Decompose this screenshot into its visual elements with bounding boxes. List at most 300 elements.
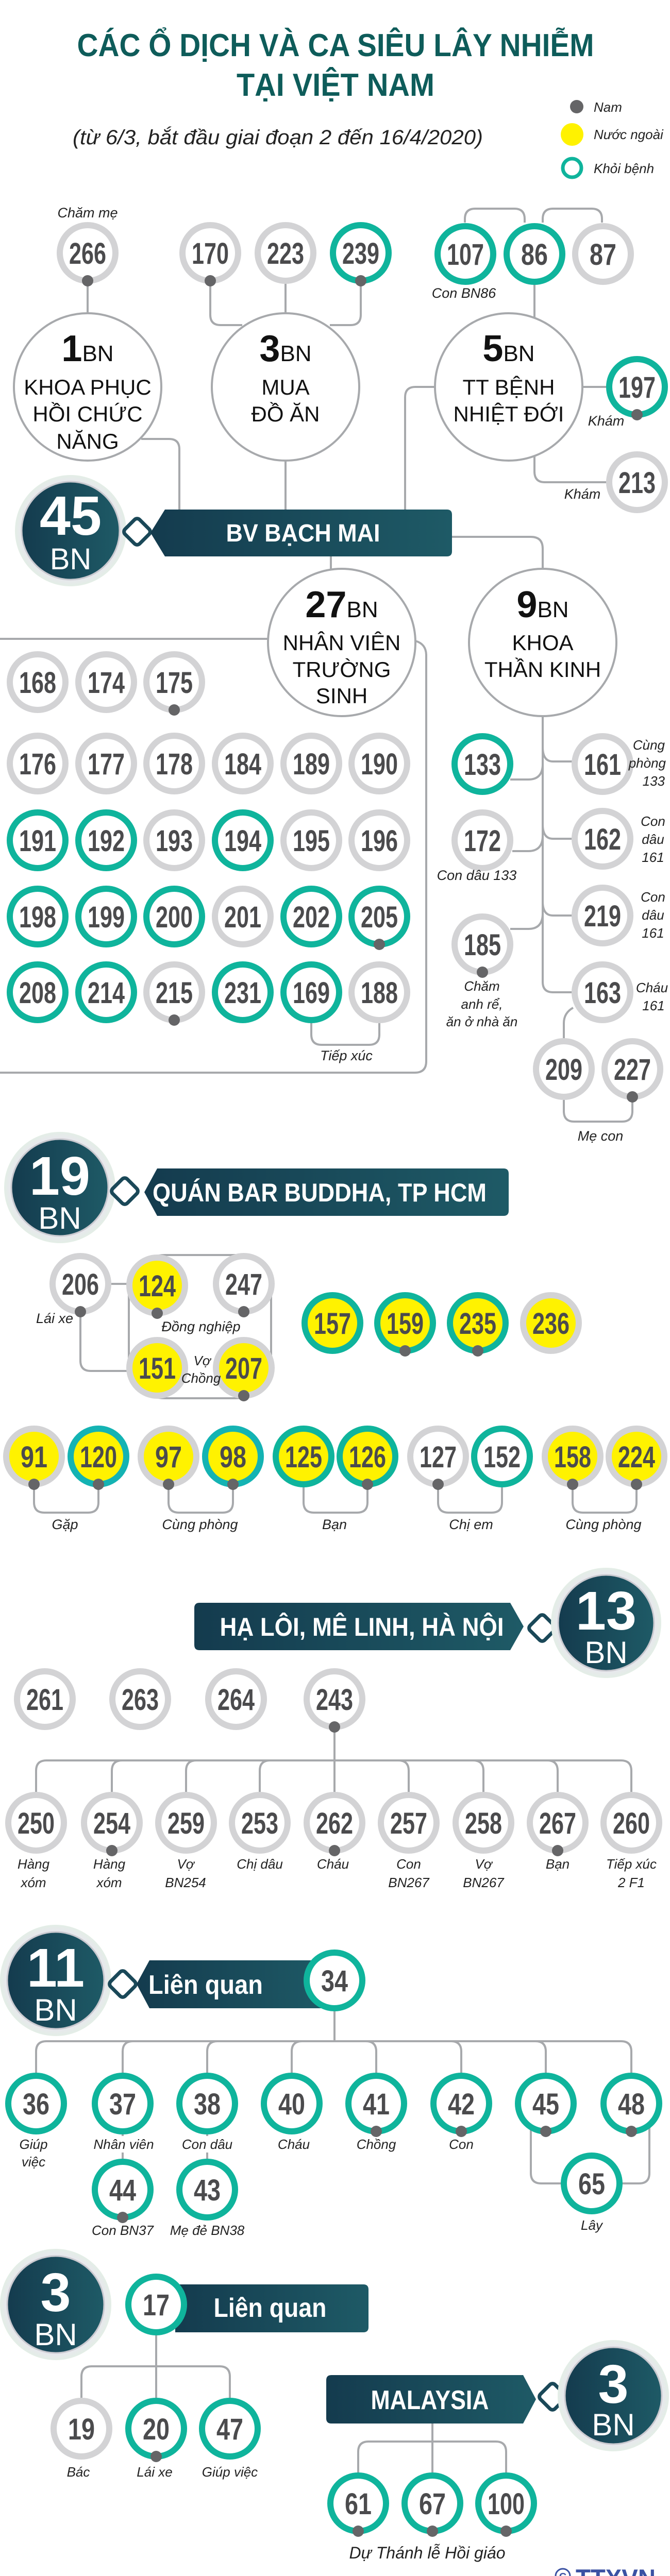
banner: BV Bach Mai — [150, 510, 452, 556]
node 239 — [333, 225, 389, 286]
node 235 — [450, 1295, 506, 1357]
labels Ha Loi relations: BN254 — [165, 1875, 206, 1890]
node 208 — [10, 964, 65, 1020]
node 125 — [276, 1429, 331, 1484]
cluster circle: 9BN khoa than kinh: KHOA — [512, 631, 574, 655]
label: Vo Chong: Vợ — [193, 1353, 212, 1368]
node 261 — [17, 1671, 73, 1727]
badge: 3 BN left: 3 — [41, 2262, 71, 2323]
cluster circle: 1BN khoa phuc hoi chuc nang: NĂNG — [56, 429, 119, 453]
node 87 — [575, 226, 631, 282]
node 169 — [283, 964, 339, 1020]
node 191 — [10, 812, 65, 868]
node 189: 189 — [293, 748, 330, 781]
node 61 — [330, 2476, 386, 2537]
node 209 — [536, 1041, 592, 1097]
node 219: 219 — [584, 900, 621, 933]
badge: 45 BN — [15, 475, 126, 586]
node 176: 176 — [19, 748, 56, 781]
badge: 11 BN: 11 — [27, 1938, 85, 1998]
node 258: 258 — [465, 1807, 502, 1840]
node 247 — [216, 1256, 272, 1317]
node 100 — [478, 2476, 534, 2537]
node 264 — [208, 1671, 264, 1727]
node 48 — [604, 2076, 659, 2137]
node 257 — [381, 1795, 437, 1851]
cluster circle: 1BN khoa phuc hoi chuc nang: 1BN — [61, 328, 114, 369]
node 45 — [518, 2076, 574, 2137]
node 247: 247 — [225, 1268, 262, 1301]
node 192: 192 — [88, 824, 125, 858]
cluster circle: 1BN khoa phuc hoi chuc nang — [14, 313, 161, 461]
node 175 — [146, 654, 202, 716]
node 199 — [78, 889, 134, 944]
node 224: 224 — [618, 1440, 655, 1474]
connector diamond — [110, 1177, 139, 1206]
connectors Ha Loi — [36, 1730, 631, 1792]
node 20 — [128, 2401, 184, 2462]
node 206: 206 — [62, 1268, 99, 1301]
badge: 19 BN: 19 — [29, 1146, 90, 1207]
node 91: 91 — [21, 1440, 47, 1474]
label: Con dau 161 (2): 161 — [642, 925, 664, 941]
label: Vo Chong — [181, 1353, 221, 1386]
node 168 — [10, 654, 65, 710]
cluster circle: 27BN nhan vien truong sinh — [268, 569, 415, 716]
node 185: 185 — [464, 928, 501, 962]
node 263 — [112, 1671, 168, 1727]
node 42 — [433, 2076, 489, 2137]
labels Ha Loi relations: Con — [396, 1856, 421, 1872]
node 174 — [78, 654, 134, 710]
node 257: 257 — [390, 1807, 427, 1840]
node 34: 34 — [321, 1964, 348, 1998]
banner: Ha Loi Me Linh: HẠ LÔI, MÊ LINH, HÀ NỘI — [220, 1612, 504, 1641]
node 97: 97 — [155, 1440, 182, 1474]
node 231 — [215, 964, 271, 1020]
node 126 — [340, 1429, 395, 1490]
label: Chi em: Chị em — [449, 1517, 493, 1532]
labels 34 relations — [20, 2136, 474, 2170]
node 194: 194 — [224, 824, 261, 858]
node 36: 36 — [23, 2088, 49, 2121]
label: Cung phong 133: Cùng — [633, 737, 665, 753]
labels Ha Loi relations: 2 F1 — [617, 1875, 645, 1890]
label: Cung phong 133: phòng — [628, 755, 666, 771]
labels second row — [92, 2217, 604, 2238]
banner: Lien quan 17: Liên quan — [213, 2293, 327, 2323]
node 184 — [215, 736, 271, 791]
label: Lai xe: Lái xe — [36, 1311, 73, 1326]
node 213: 213 — [618, 466, 656, 500]
labels Ha Loi relations: BN267 — [463, 1875, 505, 1890]
node 172 — [455, 812, 510, 868]
node 162 — [575, 811, 630, 867]
node 65 — [564, 2156, 619, 2211]
connectors Malaysia — [358, 2424, 506, 2472]
banner: Lien quan 34: Liên quan — [148, 1970, 263, 2000]
node 37 — [95, 2076, 150, 2131]
label: Chau 161 — [636, 980, 668, 1013]
cluster circle: 27BN nhan vien truong sinh: SINH — [316, 684, 367, 708]
node 158: 158 — [554, 1440, 591, 1474]
node 161: 161 — [584, 748, 621, 782]
node 157: 157 — [314, 1307, 351, 1341]
connectors 17 — [81, 2335, 230, 2398]
node 125: 125 — [285, 1440, 322, 1474]
node 162: 162 — [584, 823, 621, 856]
banner: Malaysia: MALAYSIA — [371, 2385, 489, 2415]
badge: 19 BN: BN — [38, 1201, 81, 1235]
node 239: 239 — [342, 237, 379, 270]
node 243 — [307, 1671, 362, 1733]
node 67: 67 — [419, 2487, 446, 2521]
node 98 — [205, 1429, 261, 1490]
node 258 — [456, 1795, 511, 1851]
badge: 11 BN: BN — [34, 1993, 77, 2027]
cluster circle: 5BN TT benh nhiet doi: TT BỆNH — [463, 375, 555, 399]
badge: 13 BN — [551, 1568, 661, 1678]
node 178 — [146, 736, 202, 791]
node 40 — [264, 2076, 320, 2131]
node 38: 38 — [194, 2088, 221, 2121]
node 124 — [129, 1258, 185, 1319]
badge: 13 BN: 13 — [576, 1581, 636, 1641]
node 215: 215 — [156, 976, 193, 1010]
cluster circle: 1BN khoa phuc hoi chuc nang: KHOA PHỤC — [24, 375, 152, 399]
node 161 — [575, 736, 630, 792]
labels Ha Loi relations: Cháu — [317, 1856, 349, 1872]
labels 34 relations: Nhân viên — [93, 2137, 154, 2152]
node 213 — [609, 454, 665, 510]
node 205: 205 — [361, 901, 398, 934]
labels 17 relations: Lái xe — [137, 2464, 173, 2480]
connectors section 1 — [88, 209, 606, 570]
label: Cung phong 2: Cùng phòng — [565, 1517, 642, 1532]
label: Cham anh re: ăn ở nhà ăn — [446, 1014, 517, 1029]
badge: 3 BN right — [558, 2340, 669, 2451]
label: Chăm mẹ: Chăm mẹ — [57, 205, 118, 221]
labels 34 relations: Con — [449, 2137, 474, 2152]
node 267 — [530, 1795, 585, 1856]
node 127 — [410, 1429, 466, 1490]
label: Con dau 161 — [641, 814, 665, 865]
node 197: 197 — [618, 371, 656, 404]
banner: Malaysia — [326, 2375, 536, 2424]
node 215 — [146, 964, 202, 1026]
node 199: 199 — [88, 901, 125, 934]
banner: Lien quan 17 — [175, 2284, 368, 2332]
node 236: 236 — [532, 1307, 569, 1341]
node 127: 127 — [420, 1440, 457, 1474]
legend: Nam — [594, 99, 622, 115]
node 159: 159 — [387, 1307, 424, 1341]
node 163 — [575, 964, 630, 1020]
node 97 — [141, 1429, 196, 1490]
node 243: 243 — [316, 1683, 353, 1717]
node 86 — [507, 226, 562, 282]
node 45: 45 — [532, 2088, 559, 2121]
labels second row: Con BN37 — [92, 2223, 155, 2238]
node 124: 124 — [139, 1269, 176, 1303]
node 91 — [6, 1429, 62, 1490]
title: TẠI VIỆT NAM — [237, 67, 434, 103]
node 177 — [78, 736, 134, 791]
labels 17 relations: Bác — [67, 2464, 90, 2480]
node 192 — [78, 812, 134, 868]
badge: 3 BN right: 3 — [598, 2354, 628, 2415]
node 254: 254 — [93, 1807, 130, 1840]
label: Con BN86: Con BN86 — [432, 285, 496, 301]
connector diamond — [528, 1614, 557, 1642]
node 87: 87 — [590, 238, 616, 272]
node 20: 20 — [143, 2413, 170, 2446]
node 86: 86 — [521, 238, 548, 272]
node 196 — [351, 812, 407, 868]
node 170 — [182, 225, 238, 286]
node 43 — [179, 2162, 235, 2217]
node 223: 223 — [267, 237, 304, 270]
cluster circle: 27BN nhan vien truong sinh: NHÂN VIÊN — [283, 631, 400, 655]
label: Cung phong 133: 133 — [643, 773, 665, 789]
node 250 — [8, 1795, 64, 1851]
node 227: 227 — [614, 1053, 651, 1087]
badge: 45 BN: BN — [50, 543, 91, 576]
node 17: 17 — [143, 2289, 170, 2322]
node 260: 260 — [613, 1807, 650, 1840]
badge: 3 BN right: BN — [592, 2408, 635, 2442]
node 254 — [84, 1795, 140, 1856]
labels 34 relations: việc — [22, 2154, 45, 2170]
node 170: 170 — [192, 237, 229, 270]
node 200: 200 — [156, 901, 193, 934]
connectors 34 — [36, 2011, 649, 2183]
node 152 — [474, 1429, 530, 1484]
label: Du Thanh le Hoi giao: Dự Thánh lễ Hồi giáo — [349, 2544, 506, 2562]
labels 34 relations: Giúp — [20, 2137, 47, 2152]
node 236 — [523, 1295, 579, 1351]
node 120 — [71, 1429, 126, 1490]
badge: 3 BN left — [0, 2249, 111, 2360]
node 262: 262 — [316, 1807, 353, 1840]
connectors section 2 — [0, 639, 632, 1122]
node 193: 193 — [156, 824, 193, 858]
label: Chau 161: 161 — [642, 998, 665, 1013]
node 195 — [283, 812, 339, 868]
node 214 — [78, 964, 134, 1020]
connectors HCM — [34, 1255, 636, 1513]
node 152: 152 — [483, 1440, 521, 1474]
title — [77, 27, 594, 103]
cluster circle: 9BN khoa than kinh — [469, 569, 616, 716]
node 261: 261 — [26, 1683, 63, 1717]
node 65: 65 — [578, 2167, 605, 2201]
node 36 — [8, 2076, 64, 2131]
labels second row: Mẹ đẻ BN38 — [170, 2223, 245, 2238]
node 253 — [232, 1795, 288, 1851]
label: Con dau 161: dâu — [642, 832, 664, 847]
banner: BV Bach Mai: BV BẠCH MAI — [226, 520, 380, 547]
node 201: 201 — [224, 901, 261, 934]
labels Ha Loi relations: BN267 — [388, 1875, 430, 1890]
labels Ha Loi relations: Vợ — [177, 1856, 195, 1872]
banner: Quan bar Buddha — [144, 1168, 509, 1216]
label: Con dau 161: Con — [641, 814, 665, 829]
label: Me con: Mẹ con — [578, 1128, 623, 1144]
labels 34 relations: Chồng — [357, 2137, 396, 2152]
node 206 — [53, 1256, 108, 1317]
node 188 — [351, 964, 407, 1020]
node 133 — [455, 736, 510, 792]
node 262 — [307, 1795, 362, 1856]
node 151 — [129, 1340, 185, 1396]
node 168: 168 — [19, 666, 56, 700]
label: Con dau 161 (2): Con — [641, 889, 665, 905]
node 259: 259 — [167, 1807, 205, 1840]
node 41: 41 — [363, 2088, 390, 2121]
node 196: 196 — [361, 824, 398, 858]
node 163: 163 — [584, 976, 621, 1010]
node 47: 47 — [216, 2413, 243, 2446]
node 227 — [605, 1041, 660, 1103]
node 17 — [128, 2277, 184, 2332]
node 202 — [283, 889, 339, 944]
node 208: 208 — [19, 976, 56, 1010]
node 48: 48 — [618, 2088, 645, 2121]
node 260 — [604, 1795, 659, 1851]
title: CÁC Ổ DỊCH VÀ CA SIÊU LÂY NHIỄM — [77, 27, 594, 63]
label: Con dau 161 (2): dâu — [642, 907, 664, 923]
label: Gap: Gặp — [52, 1517, 78, 1532]
node 259 — [158, 1795, 214, 1851]
node 200 — [146, 889, 202, 944]
node 198 — [10, 889, 65, 944]
badge: 11 BN — [0, 1925, 111, 2036]
cluster circle: 9BN khoa than kinh: 9BN — [516, 584, 569, 625]
node 224 — [609, 1429, 664, 1490]
labels Ha Loi relations: Chị dâu — [237, 1856, 283, 1872]
label: Vo Chong: Chồng — [181, 1370, 221, 1386]
badge: 13 BN: BN — [584, 1635, 628, 1670]
node 43: 43 — [194, 2174, 221, 2207]
cluster circle: 5BN TT benh nhiet doi: NHIỆT ĐỚI — [454, 402, 564, 426]
labels Ha Loi relations: Tiếp xúc — [606, 1856, 657, 1872]
node 250: 250 — [18, 1807, 55, 1840]
cluster circle: 3BN mua do an: 3BN — [259, 328, 312, 369]
labels Ha Loi relations — [18, 1856, 657, 1890]
cluster circle: 27BN nhan vien truong sinh: 27BN — [305, 584, 378, 625]
node 267: 267 — [539, 1807, 576, 1840]
grid: truong sinh patients — [10, 654, 407, 1026]
node 41 — [348, 2076, 404, 2137]
label: Dong nghiep: Đồng nghiệp — [161, 1319, 241, 1334]
node 191: 191 — [19, 824, 56, 858]
label: Tiep xuc: Tiếp xúc — [320, 1048, 373, 1063]
banner: Lien quan 34 — [137, 1960, 332, 2008]
banner: Quan bar Buddha: QUÁN BAR BUDDHA, TP HCM — [153, 1178, 487, 1207]
node 172: 172 — [464, 824, 501, 858]
node 253: 253 — [241, 1807, 278, 1840]
label: Con dau 161 (2) — [641, 889, 665, 941]
cluster circle: 5BN TT benh nhiet doi — [435, 313, 582, 461]
cluster circle: 3BN mua do an: ĐỒ ĂN — [251, 401, 320, 426]
cluster circle: 3BN mua do an: MUA — [261, 375, 310, 399]
labels second row: Lây — [581, 2217, 604, 2233]
node 177: 177 — [88, 748, 125, 781]
node 37: 37 — [109, 2088, 136, 2121]
node 107: 107 — [447, 238, 484, 272]
node 107 — [438, 226, 493, 282]
node 207: 207 — [225, 1352, 262, 1385]
labels Ha Loi relations: Vợ — [475, 1856, 493, 1872]
node 38 — [179, 2076, 235, 2131]
node 190 — [351, 736, 407, 791]
node 44 — [95, 2162, 150, 2223]
node 202: 202 — [293, 901, 330, 934]
node 98: 98 — [220, 1440, 246, 1474]
labels Ha Loi relations: Bạn — [546, 1856, 569, 1872]
label: Con dau 133: Con dâu 133 — [437, 868, 516, 883]
node 197 — [609, 359, 665, 420]
node 223 — [258, 225, 313, 281]
cluster circle: 5BN TT benh nhiet doi: 5BN — [482, 328, 535, 369]
labels 34 relations: Con dâu — [182, 2137, 232, 2152]
node 157 — [305, 1295, 360, 1351]
node 34 — [307, 1953, 362, 2008]
badge: 19 BN — [4, 1132, 115, 1243]
node 133: 133 — [464, 748, 501, 782]
legend — [561, 99, 664, 177]
label: Con dau 161: 161 — [642, 850, 664, 865]
connector diamond — [538, 2382, 567, 2411]
node 231: 231 — [224, 976, 261, 1010]
labels Ha Loi relations: Hàng — [93, 1856, 126, 1872]
node 178: 178 — [156, 748, 193, 781]
node 201 — [215, 889, 271, 944]
node 266 — [60, 225, 115, 286]
node 126: 126 — [349, 1440, 386, 1474]
node 205 — [351, 889, 407, 950]
node 100: 100 — [488, 2487, 525, 2521]
connector diamond — [108, 1970, 137, 1998]
node 207 — [216, 1340, 272, 1401]
node 189 — [283, 736, 339, 791]
node 120: 120 — [80, 1440, 117, 1474]
legend: Khỏi bệnh — [594, 161, 654, 176]
labels Ha Loi relations: xóm — [95, 1875, 122, 1890]
node 159 — [377, 1295, 433, 1357]
label: Cung phong: Cùng phòng — [162, 1517, 238, 1532]
node 195: 195 — [293, 824, 330, 858]
badge: 45 BN: 45 — [40, 484, 102, 547]
cluster circle: 3BN mua do an — [212, 313, 359, 461]
subtitle: (từ 6/3, bắt đầu giai đoạn 2 đến 16/4/2020) — [73, 126, 483, 149]
node 209: 209 — [545, 1053, 582, 1087]
labels 17 relations: Giúp việc — [202, 2464, 258, 2480]
banner: Ha Loi Me Linh — [194, 1603, 524, 1650]
node 61: 61 — [345, 2487, 372, 2521]
cluster circle: 9BN khoa than kinh: THẦN KINH — [484, 657, 601, 682]
node 235: 235 — [459, 1307, 496, 1341]
node 194 — [215, 812, 271, 868]
node 190: 190 — [361, 748, 398, 781]
node 264: 264 — [217, 1683, 255, 1717]
label: Cung phong 133 — [628, 737, 666, 789]
node 151: 151 — [139, 1352, 176, 1385]
node 19 — [54, 2401, 109, 2456]
node 198: 198 — [19, 901, 56, 934]
labels Ha Loi relations: Hàng — [18, 1856, 50, 1872]
